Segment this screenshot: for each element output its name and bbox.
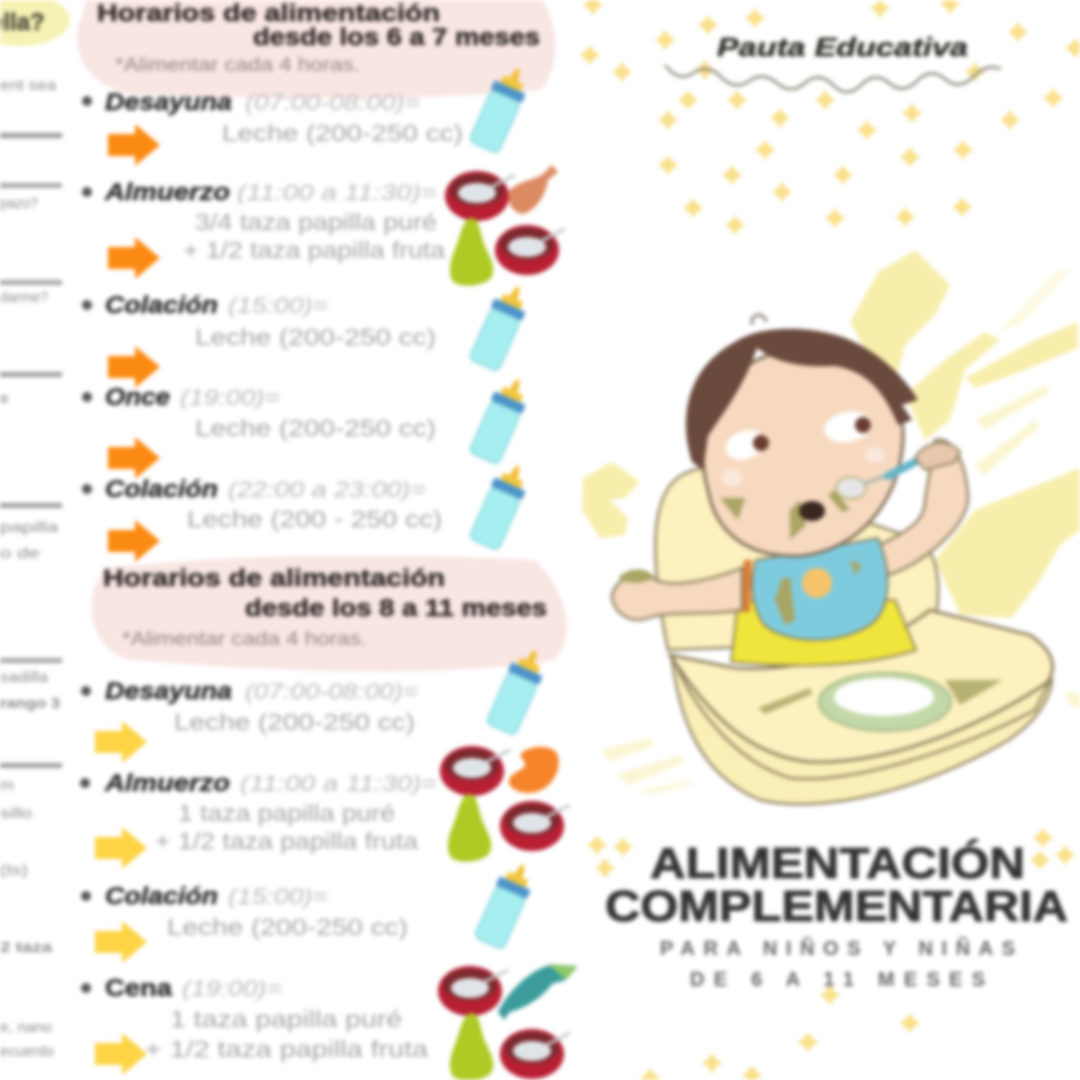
row: desayuna: (07:00-08:00)=: [245, 679, 418, 704]
row: desayuna: Desayuna: [105, 678, 232, 705]
illustration: baby eating in high chair: [582, 250, 1080, 804]
row: almuerzo: 1 taza papilla puré: [178, 800, 395, 826]
heading: Horarios de alimentación: [103, 565, 445, 592]
row: desayuna: Desayuna: [105, 89, 232, 116]
icon: bottle: [468, 279, 534, 372]
row: cena: (19:00)=: [182, 976, 282, 1001]
decorative stars: [580, 0, 1080, 1080]
cropped text fragments: o de: [0, 545, 40, 562]
arrow: [108, 520, 160, 562]
left page fragment: [0, 0, 70, 1060]
cropped text fragments: ent sea: [0, 77, 57, 94]
cropped text fragments: rango 3: [0, 695, 60, 712]
row: almuerzo: Almuerzo: [104, 770, 230, 797]
row: almuerzo: (11:00 a 11:30)=: [240, 771, 437, 796]
tagline: DE 6 A 11 MESES: [690, 969, 985, 991]
strap: [737, 560, 752, 612]
cropped text fragments: pazo?: [0, 195, 38, 212]
cropped text fragments: [0, 77, 62, 1060]
arrow: [108, 346, 160, 388]
main title: COMPLEMENTARIA: [605, 882, 1068, 931]
row: colación: Leche (200-250 cc): [195, 324, 436, 350]
yellow highlighted question: [0, 0, 70, 46]
row: desayuna: [81, 678, 418, 735]
cropped text fragments: ecuerdo: [0, 1043, 54, 1060]
spoon: [836, 443, 960, 499]
row: once: (19:00)=: [180, 385, 280, 410]
heading background: [91, 556, 567, 672]
row: desayuna: [82, 89, 463, 146]
cropped text fragments: 2 taza: [0, 939, 53, 956]
row: desayuna: Leche (200-250 cc): [222, 120, 463, 146]
row: colación noche: (22:00 a 23:00)=: [228, 477, 426, 502]
row: cena: Cena: [105, 975, 173, 1002]
arrow: [108, 237, 160, 279]
row: almuerzo: + 1/2 taza papilla fruta: [183, 237, 445, 263]
panel: horarios 8 a 11 meses: [80, 556, 578, 1080]
row: cena: [81, 975, 428, 1062]
cropped text fragments: sillo: [0, 805, 32, 822]
arrow: [95, 827, 147, 869]
arrow: [95, 721, 147, 763]
row: colación: Leche (200-250 cc): [167, 914, 408, 940]
row: colación noche: Leche (200 - 250 cc): [187, 506, 442, 532]
panel: horarios 6 a 7 meses: [77, 0, 565, 562]
row: almuerzo: [80, 770, 437, 854]
heading: desde los 8 a 11 meses: [245, 595, 547, 622]
cropped text fragments: darme?: [0, 289, 48, 306]
icon: bottle: [468, 458, 534, 551]
heading: Horarios de alimentación: [97, 0, 440, 27]
note: *Alimentar cada 4 horas.: [115, 55, 360, 76]
row: desayuna: Leche (200-250 cc): [174, 709, 415, 735]
icon: bottle: [468, 372, 534, 465]
yellow body: [731, 600, 916, 666]
icon: meal: [445, 165, 565, 286]
row: once: Leche (200-250 cc): [195, 415, 436, 441]
row: colación: (15:00)=: [228, 884, 328, 909]
main title: ALIMENTACIÓN: [650, 838, 1025, 888]
row: almuerzo: [82, 179, 445, 263]
row: almuerzo: Almuerzo: [104, 179, 230, 206]
cheek and mouth: [720, 447, 885, 540]
background paint splash: [582, 250, 1080, 795]
row: almuerzo: (11:00 a 11:30)=: [237, 180, 437, 205]
arrow: [95, 921, 147, 963]
hair: [686, 329, 918, 470]
row: colación: Colación: [105, 292, 218, 319]
cropped text fragments: (ts): [0, 862, 28, 879]
arrow: [95, 1033, 147, 1075]
heading: [103, 565, 547, 622]
row: once: [82, 384, 436, 441]
cropped text fragments: e, nano: [0, 1019, 52, 1036]
head: [703, 348, 903, 556]
tagline: [660, 937, 1015, 991]
row: almuerzo: + 1/2 taza papilla fruta: [155, 828, 418, 854]
icon: bottle: [468, 61, 534, 154]
eyes: [721, 408, 874, 465]
tagline: PARA NIÑOS Y NIÑAS: [660, 937, 1015, 960]
icon: meal: [438, 964, 578, 1080]
cropped text fragments: m: [0, 777, 14, 794]
panel: cover: [580, 0, 1080, 1080]
right arm: [880, 440, 968, 575]
subtitle heading: pauta educativa: Pauta Educativa: [717, 32, 968, 62]
heading: [97, 0, 540, 51]
row: desayuna: (07:00-08:00)=: [245, 90, 420, 115]
row: colación: (15:00)=: [228, 293, 328, 318]
row: almuerzo: 3/4 taza papilla puré: [195, 209, 437, 235]
food smears: [945, 680, 1003, 705]
cropped text fragments: sadilla: [0, 669, 49, 686]
tray: [670, 610, 1053, 804]
left arm: [612, 568, 742, 620]
arrow: [108, 437, 160, 479]
bib: [752, 538, 888, 640]
heading background: [77, 0, 555, 98]
icon: bottle: [485, 643, 551, 736]
row: colación: [81, 883, 408, 940]
subtitle heading: pauta educativa: [665, 32, 1001, 92]
note: *Alimentar cada 4 horas.: [122, 629, 367, 650]
row: colación noche: Colación: [105, 476, 218, 503]
cropped text fragments: o: [0, 390, 8, 407]
hair curl: [752, 315, 766, 325]
plate: [819, 673, 951, 731]
cropped text fragments: papilla: [0, 519, 59, 536]
row: once: Once: [105, 384, 170, 411]
icon: meal: [440, 746, 570, 862]
arrow: [108, 124, 160, 166]
row: colación noche: [82, 476, 442, 532]
chair back: [655, 468, 938, 650]
row: cena: 1 taza papilla puré: [170, 1006, 402, 1032]
icon: bottle: [473, 857, 539, 950]
heading: desde los 6 a 7 meses: [253, 24, 540, 51]
main title: [605, 838, 1068, 931]
row: cena: + 1/2 taza papilla fruta: [145, 1036, 428, 1062]
row: colación: [82, 292, 436, 350]
row: colación: Colación: [105, 883, 218, 910]
